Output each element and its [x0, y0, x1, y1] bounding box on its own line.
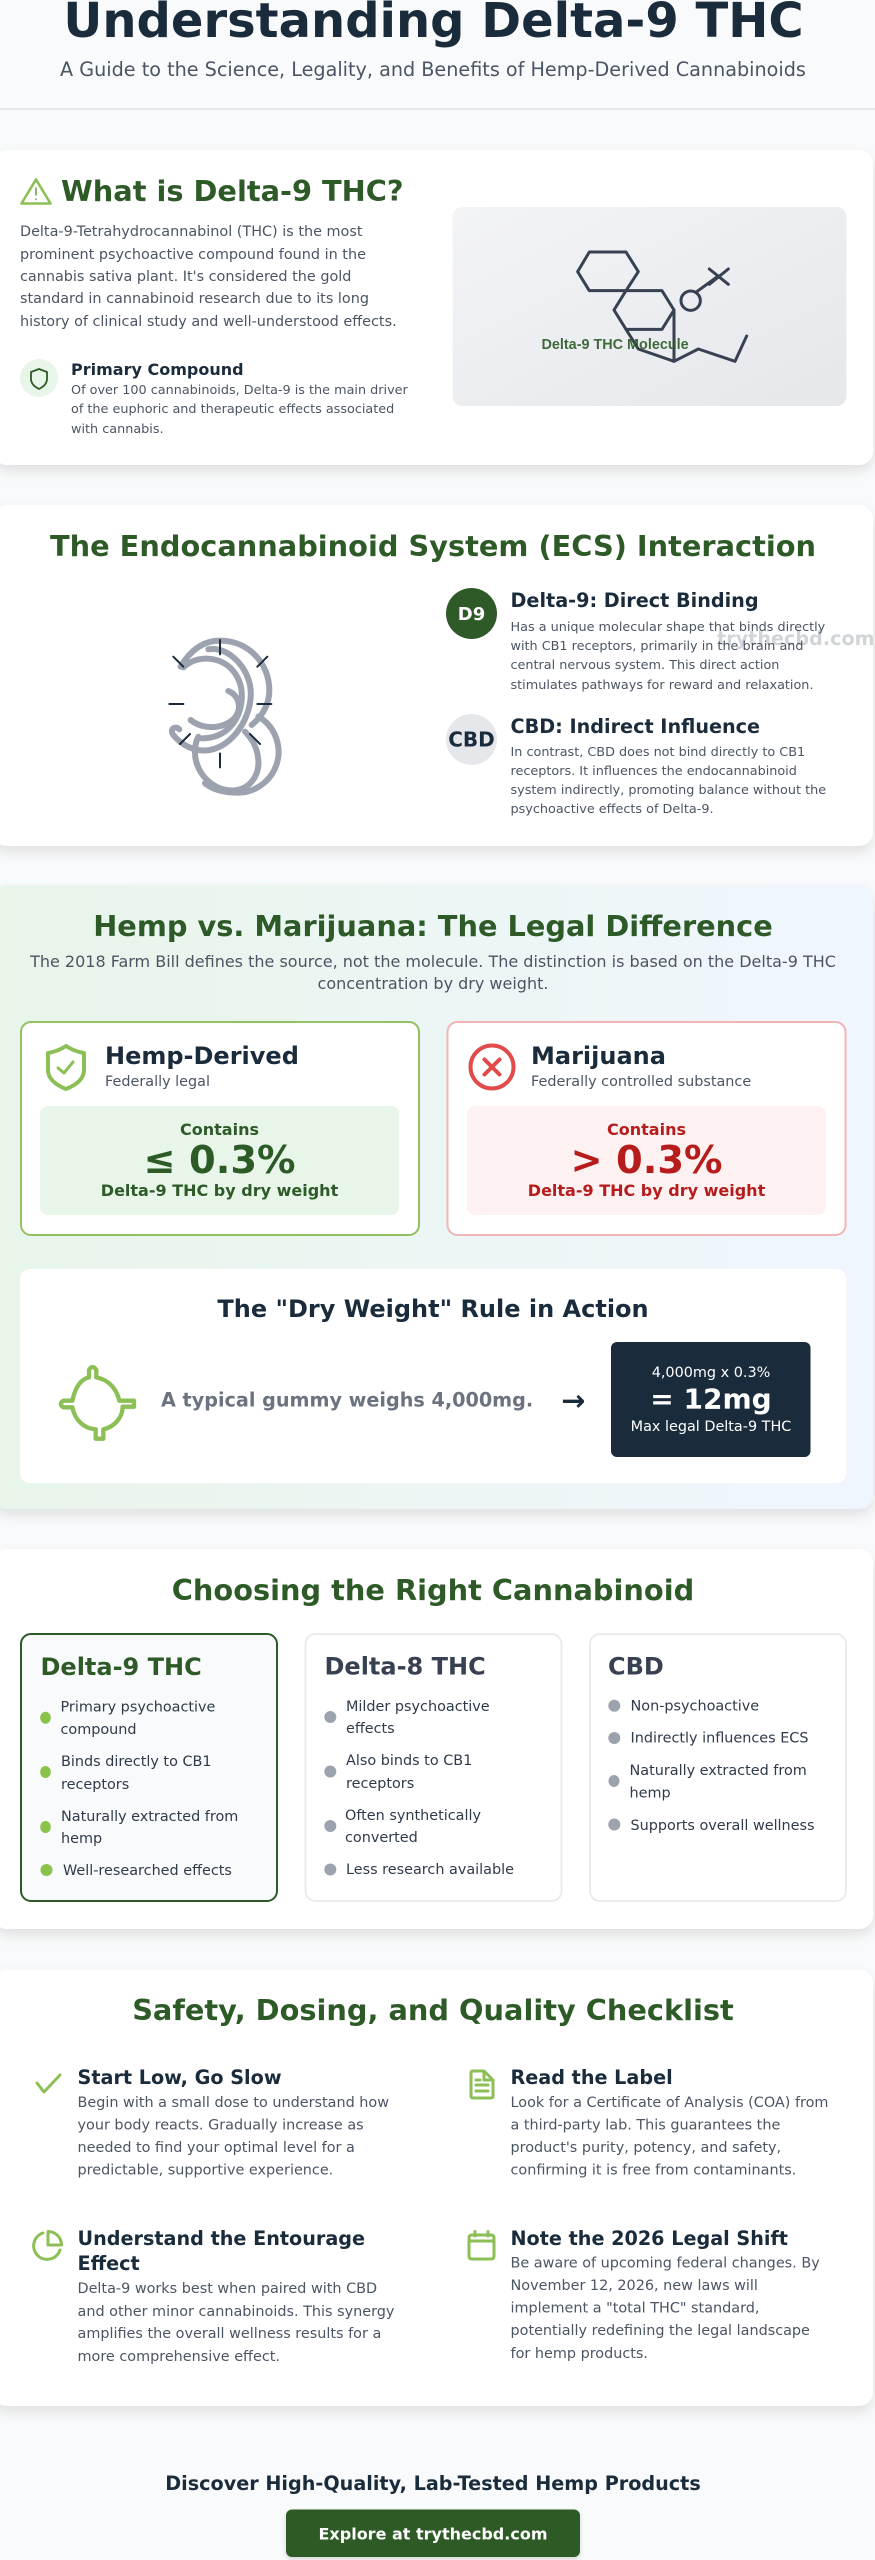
icon: shield badge — [20, 359, 58, 397]
result box — [611, 1342, 810, 1457]
intro paragraph: standard in cannabinoid research due to its long — [20, 291, 369, 307]
delta-9 binding text — [510, 589, 826, 693]
molecule panel — [452, 207, 846, 406]
hemp heading: Federally legal — [105, 1074, 210, 1090]
dry weight heading: The "Dry Weight" Rule in Action — [217, 1295, 649, 1323]
hemp limit box: ≤ 0.3% — [143, 1138, 296, 1183]
column: cbd: Indirectly influences ECS — [630, 1731, 808, 1747]
item: start low: your body reacts. Gradually increase as — [78, 2118, 364, 2134]
hemp heading — [105, 1042, 299, 1090]
item: 2026 shift: Note the 2026 Legal Shift — [510, 2227, 788, 2250]
column: cbd: Non-psychoactive — [630, 1699, 759, 1715]
header — [0, 0, 875, 110]
cta heading: Discover High-Quality, Lab-Tested Hemp Products — [165, 2472, 701, 2495]
item: entourage: amplifies the overall wellness results for a — [78, 2326, 381, 2342]
delta-9 badge — [446, 588, 497, 639]
column: delta-8 — [306, 1634, 562, 1901]
column: delta-9: Primary psychoactive — [60, 1700, 216, 1716]
panel: choosing cannabinoid — [0, 1549, 873, 1929]
delta-9 badge: D9 — [458, 604, 485, 625]
result box: = 12mg — [650, 1382, 772, 1416]
footer call to action — [165, 2472, 701, 2557]
legal intro: The 2018 Farm Bill defines the source, not the molecule. The distinction is based on the Delta-9 THC — [29, 952, 836, 971]
column: delta-8: effects — [346, 1721, 395, 1737]
result box: 4,000mg x 0.3% — [652, 1365, 770, 1381]
column: delta-9: hemp — [61, 1831, 102, 1847]
delta-9 binding text: stimulates pathways for reward and relaxation. — [510, 678, 814, 693]
intro paragraph: cannabis sativa plant. It's considered the gold — [20, 269, 351, 285]
column: delta-8: Often synthetically — [345, 1808, 481, 1824]
item: entourage: more comprehensive effect. — [78, 2349, 280, 2365]
molecule diagram — [578, 252, 747, 361]
item: 2026 shift: implement a "total THC" standard, — [510, 2300, 759, 2316]
hemp heading: Hemp-Derived — [105, 1042, 299, 1070]
intro paragraph: Delta-9-Tetrahydrocannabinol (THC) is the most — [20, 224, 363, 240]
column: delta-9 — [21, 1634, 277, 1901]
item: start low: predictable, supportive experience. — [78, 2162, 333, 2178]
item: read the label — [471, 2066, 828, 2178]
column: delta-8: Milder psychoactive — [346, 1699, 490, 1715]
panel: ECS interaction — [0, 505, 875, 846]
item: read the label: confirming it is free from contaminants. — [510, 2162, 796, 2178]
item: read the label: product's purity, potency, and safety, — [510, 2140, 781, 2156]
delta-9 binding text: with CB1 receptors, primarily in the brain and — [510, 639, 804, 654]
primary compound: Primary Compound — [71, 360, 244, 379]
column: delta-8: Delta-8 THC — [324, 1652, 486, 1680]
result box: Max legal Delta-9 THC — [631, 1419, 791, 1435]
intro paragraph: history of clinical study and well-understood effects. — [20, 314, 397, 330]
marijuana heading: Marijuana — [531, 1042, 666, 1070]
delta-9 binding text: Has a unique molecular shape that binds directly — [510, 620, 826, 635]
icon: check — [37, 2075, 60, 2092]
cbd influence text: psychoactive effects of Delta-9. — [510, 802, 714, 817]
column: delta-8: converted — [345, 1830, 418, 1846]
item: start low: Begin with a small dose to understand how — [78, 2095, 389, 2111]
icon: x circle — [470, 1046, 514, 1088]
item: entourage: Delta-9 works best when paired with CBD — [78, 2281, 377, 2297]
item: 2026 shift: potentially redefining the legal landscape — [510, 2323, 810, 2339]
intro paragraph — [20, 224, 397, 330]
primary compound: of the euphoric and therapeutic effects associated — [71, 402, 394, 417]
heading: Safety, Dosing, and Quality Checklist — [132, 1993, 734, 2027]
marijuana limit box: Contains — [607, 1120, 686, 1139]
column: delta-9: receptors — [61, 1777, 129, 1793]
icon: warning triangle — [22, 180, 50, 204]
legal intro: concentration by dry weight. — [318, 974, 548, 993]
gummy text: A typical gummy weighs 4,000mg. — [161, 1388, 533, 1412]
item: read the label: Read the Label — [510, 2066, 673, 2089]
cbd influence text: CBD: Indirect Influence — [510, 715, 760, 738]
delta-9 binding text: Delta-9: Direct Binding — [510, 589, 759, 612]
heading: The Endocannabinoid System (ECS) Interaction — [50, 529, 816, 563]
molecule label: Delta-9 THC Molecule — [542, 337, 689, 353]
hemp limit box: Delta-9 THC by dry weight — [101, 1181, 339, 1200]
item: entourage: and other minor cannabinoids. This synergy — [78, 2304, 395, 2320]
cbd badge — [446, 714, 497, 765]
column: delta-9: compound — [60, 1722, 137, 1738]
column: cbd — [590, 1634, 846, 1901]
heading: Choosing the Right Cannabinoid — [172, 1573, 694, 1607]
item: start low: Start Low, Go Slow — [78, 2066, 282, 2089]
dry weight panel — [20, 1269, 846, 1483]
column: cbd: Supports overall wellness — [630, 1818, 815, 1834]
item: 2026 shift: Be aware of upcoming federal changes. By — [510, 2256, 820, 2272]
icon: calendar — [469, 2232, 494, 2259]
column: cbd: Naturally extracted from — [630, 1763, 807, 1779]
item: 2026 shift — [469, 2227, 820, 2362]
column: delta-9: Well-researched effects — [63, 1863, 232, 1879]
marijuana limit box — [467, 1106, 826, 1215]
icon: receptor diagram — [169, 640, 279, 793]
column: delta-9: Delta-9 THC — [40, 1653, 202, 1681]
item: start low: needed to find your optimal level for a — [78, 2140, 355, 2156]
marijuana limit box: Delta-9 THC by dry weight — [528, 1181, 766, 1200]
delta-9 binding text: central nervous system. This direct action — [510, 658, 779, 673]
arrow: → — [561, 1384, 586, 1418]
item: entourage: Understand the Entourage — [78, 2227, 365, 2250]
item: 2026 shift: November 12, 2026, new laws will — [510, 2278, 758, 2294]
cbd influence text: receptors. It influences the endocannabinoid — [510, 764, 797, 779]
marijuana heading — [531, 1042, 751, 1090]
primary compound: with cannabis. — [71, 422, 164, 437]
marijuana card — [448, 1022, 846, 1235]
marijuana heading: Federally controlled substance — [531, 1074, 751, 1090]
primary compound — [71, 360, 409, 437]
column: delta-8: receptors — [346, 1776, 414, 1792]
icon: gummy — [61, 1367, 134, 1439]
heading: What is Delta-9 THC? — [61, 174, 404, 208]
icon: document — [471, 2071, 493, 2098]
hemp limit box: Contains — [180, 1120, 259, 1139]
cbd influence text: system indirectly, promoting balance without the — [510, 783, 826, 798]
primary compound: Of over 100 cannabinoids, Delta-9 is the main driver — [71, 383, 409, 398]
item: start low — [37, 2066, 389, 2178]
subtitle: A Guide to the Science, Legality, and Benefits of Hemp-Derived Cannabinoids — [60, 58, 806, 81]
column: cbd: hemp — [630, 1786, 671, 1802]
cta button: Explore at trythecbd.com — [319, 2524, 547, 2544]
cbd influence text — [510, 715, 826, 817]
column: delta-9: Naturally extracted from — [61, 1809, 238, 1825]
heading: Hemp vs. Marijuana: The Legal Difference — [93, 909, 773, 943]
item: entourage — [34, 2227, 395, 2365]
intro paragraph: prominent psychoactive compound found in the — [20, 247, 366, 263]
watermark: trythecbd.com — [717, 627, 875, 650]
column: delta-8: Less research available — [346, 1862, 514, 1878]
item: read the label: a third-party lab. This guarantees the — [510, 2118, 780, 2134]
icon: pie chart — [34, 2232, 62, 2259]
item: 2026 shift: for hemp products. — [510, 2346, 648, 2362]
hemp limit box — [40, 1106, 399, 1215]
cbd influence text: In contrast, CBD does not bind directly to CB1 — [510, 745, 805, 760]
hemp card — [21, 1022, 419, 1235]
column: delta-9: Binds directly to CB1 — [61, 1754, 212, 1770]
item: read the label: Look for a Certificate of Analysis (COA) from — [510, 2095, 828, 2111]
panel: checklist — [0, 1970, 873, 2406]
icon: shield check — [48, 1046, 84, 1089]
item: entourage: Effect — [78, 2252, 140, 2275]
panel: what is delta-9 — [0, 150, 873, 465]
cta button — [286, 2510, 580, 2557]
legal intro — [29, 952, 836, 993]
column: cbd: CBD — [608, 1652, 664, 1680]
cbd badge: CBD — [448, 728, 495, 752]
column: delta-8: Also binds to CB1 — [346, 1753, 472, 1769]
marijuana limit box: > 0.3% — [570, 1138, 723, 1183]
panel: legal difference — [0, 885, 873, 1509]
